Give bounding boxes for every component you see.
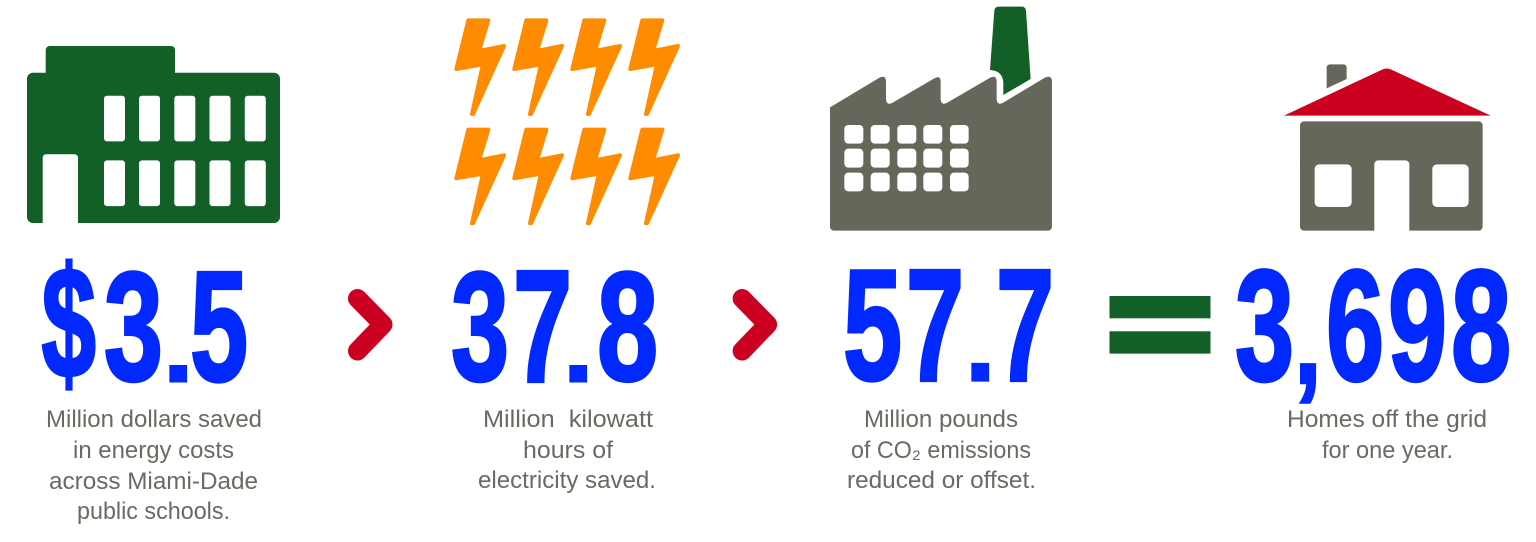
number: $3.5: 3 [104, 241, 163, 414]
caption: homes off the grid: for one year. [1322, 437, 1453, 464]
caption: dollars saved: Million dollars saved [46, 406, 262, 433]
icon: equals sign [1110, 296, 1210, 354]
factory chimney [990, 7, 1031, 95]
caption: kilowatt hours: electricity saved. [478, 467, 656, 494]
number: $3.5: 5 [190, 239, 248, 415]
number: 3,698: 9 [1388, 237, 1447, 414]
number: 37.8: . [563, 287, 594, 404]
caption: dollars saved: across Miami-Dade [49, 468, 258, 495]
caption: dollars saved: public schools. [77, 498, 230, 525]
number: 37.8: 8 [597, 240, 658, 413]
number: 37.8: 7 [513, 237, 572, 416]
number: $3.5: $ [42, 234, 96, 411]
number: 57.7: 7 [906, 236, 964, 415]
number: 57.7: . [965, 281, 996, 404]
factory body [830, 77, 1052, 231]
icon: school building [27, 46, 280, 223]
number: 3,698: 6 [1326, 238, 1384, 414]
caption: dollars saved [46, 406, 262, 525]
caption: homes off the grid [1287, 406, 1487, 464]
number: 57.7 [843, 236, 1054, 415]
number: 3,698: , [1294, 270, 1322, 410]
arrow: chevron two [742, 298, 768, 351]
caption: kilowatt hours: hours of [523, 437, 613, 464]
number: 57.7: 5 [843, 236, 902, 414]
number: $3.5 [42, 234, 248, 415]
caption: dollars saved: in energy costs [73, 437, 234, 464]
caption: pounds of CO2 [847, 406, 1036, 494]
house body [1300, 121, 1483, 231]
number: 3,698: 3 [1235, 237, 1294, 414]
number: 57.7: 7 [996, 236, 1054, 415]
caption: pounds of CO2: of CO₂ emissions [851, 437, 1031, 464]
number: $3.5: . [163, 287, 194, 404]
number: 37.8: 3 [451, 240, 509, 414]
icon: house [1284, 64, 1491, 231]
number: 3,698 [1235, 237, 1511, 414]
caption: homes off the grid: Homes off the grid [1287, 406, 1487, 433]
caption: kilowatt hours [478, 406, 656, 494]
number: 3,698: 8 [1451, 237, 1511, 414]
house roof [1284, 68, 1491, 116]
caption: pounds of CO2: reduced or offset. [847, 467, 1036, 494]
icon: factory [830, 7, 1052, 231]
number: 37.8 [451, 237, 658, 416]
house chimney [1327, 64, 1347, 88]
icon: lightning bolts [456, 20, 678, 223]
arrow: chevron one [358, 298, 383, 351]
caption: pounds of CO2: Million pounds [864, 406, 1018, 433]
caption: kilowatt hours: Million kilowatt [483, 406, 653, 433]
